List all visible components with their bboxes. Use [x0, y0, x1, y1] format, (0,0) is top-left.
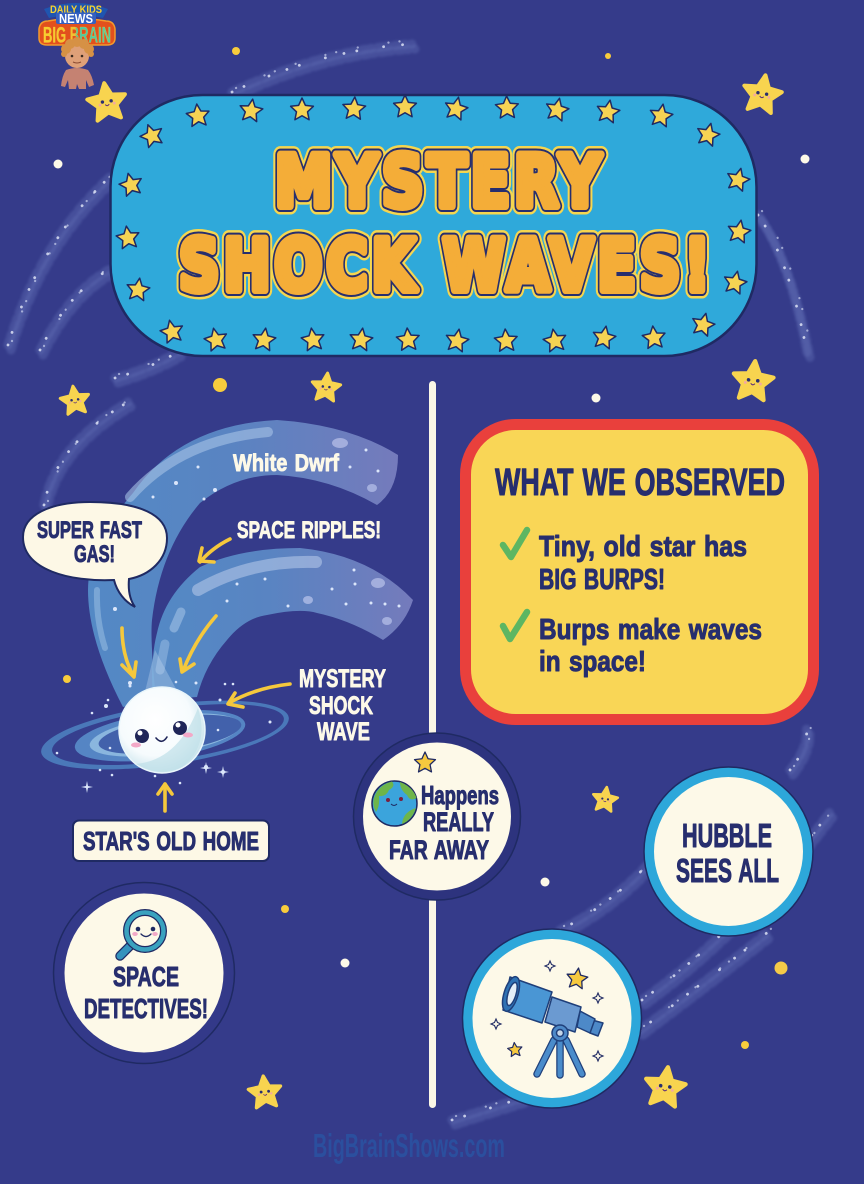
logo: Daily Kids News Big Brain: BIG BRAIN	[43, 22, 111, 48]
title text: SHOCK WAVES!	[179, 225, 714, 307]
yellow arrows	[122, 539, 290, 811]
check item 1	[503, 530, 747, 596]
speech bubble: super fast gas: GAS!	[74, 541, 115, 568]
check item 2: in space!	[539, 646, 646, 678]
speech bubble: super fast gas: SUPER FAST	[37, 517, 142, 544]
title text: SHOCK WAVES!	[179, 225, 714, 307]
label: space ripples: SPACE RIPPLES!	[237, 517, 381, 544]
circle: space detectives: DETECTIVES!	[84, 993, 208, 1024]
sparkles	[56, 681, 272, 793]
circle: happens really far away: Happens	[421, 780, 499, 810]
check item 1: BIG BURPS!	[539, 564, 665, 596]
speech bubble: super fast gas	[23, 502, 167, 607]
circle: telescope	[462, 929, 642, 1108]
check item 1: Tiny, old star has	[539, 531, 747, 563]
circle: happens really far away: REALLY	[423, 807, 494, 837]
title text: MYSTERY	[275, 141, 605, 223]
observation panel	[466, 424, 814, 720]
circle: hubble sees all: SEES ALL	[676, 852, 779, 889]
decorative kawaii stars	[59, 72, 784, 1108]
lower jet arc	[152, 548, 413, 700]
label: mystery shock wave: SHOCK	[309, 692, 373, 720]
label: white dwarf: White Dwrf	[233, 450, 340, 477]
shock wave rings	[37, 688, 293, 782]
footer url: BigBrainShows.com	[313, 1127, 505, 1164]
title text	[179, 141, 714, 307]
check item 2	[503, 612, 762, 678]
circle: space detectives	[54, 882, 234, 1064]
label: mystery shock wave: WAVE	[317, 718, 370, 746]
icon: star	[415, 752, 435, 772]
logo: Daily Kids News Big Brain: DAILY KIDS	[50, 4, 102, 16]
circle: happens really far away: FAR AWAY	[389, 835, 489, 865]
label: star's old home: STAR'S OLD HOME	[83, 826, 259, 856]
icon: telescope	[499, 975, 603, 1075]
icon: earth	[372, 781, 417, 826]
title banner	[110, 95, 756, 356]
check item 2: Burps make waves	[539, 614, 762, 646]
banner star border	[115, 95, 752, 353]
title text: MYSTERY	[275, 141, 605, 223]
logo: Daily Kids News Big Brain	[39, 3, 115, 89]
icon: magnifying glass	[120, 912, 164, 956]
glow beam	[143, 650, 182, 700]
background dots	[54, 47, 810, 1049]
title text: MYSTERY	[275, 141, 605, 223]
title text: SHOCK WAVES!	[179, 225, 714, 307]
circle: hubble sees all: HUBBLE	[682, 817, 772, 854]
smiling white dwarf star	[119, 687, 205, 773]
white dwarf jets illustration	[23, 420, 413, 861]
circle: hubble sees all	[644, 767, 813, 936]
circle: happens really far away	[354, 733, 520, 900]
label: star's old home	[73, 820, 269, 861]
logo: Daily Kids News Big Brain: NEWS	[59, 11, 93, 26]
center divider	[429, 381, 436, 1108]
circle: space detectives: SPACE	[113, 961, 179, 992]
mascot	[61, 37, 94, 89]
label: mystery shock wave: MYSTERY	[299, 665, 386, 693]
upper jet arc	[88, 420, 398, 707]
label: mystery shock wave	[299, 665, 386, 746]
